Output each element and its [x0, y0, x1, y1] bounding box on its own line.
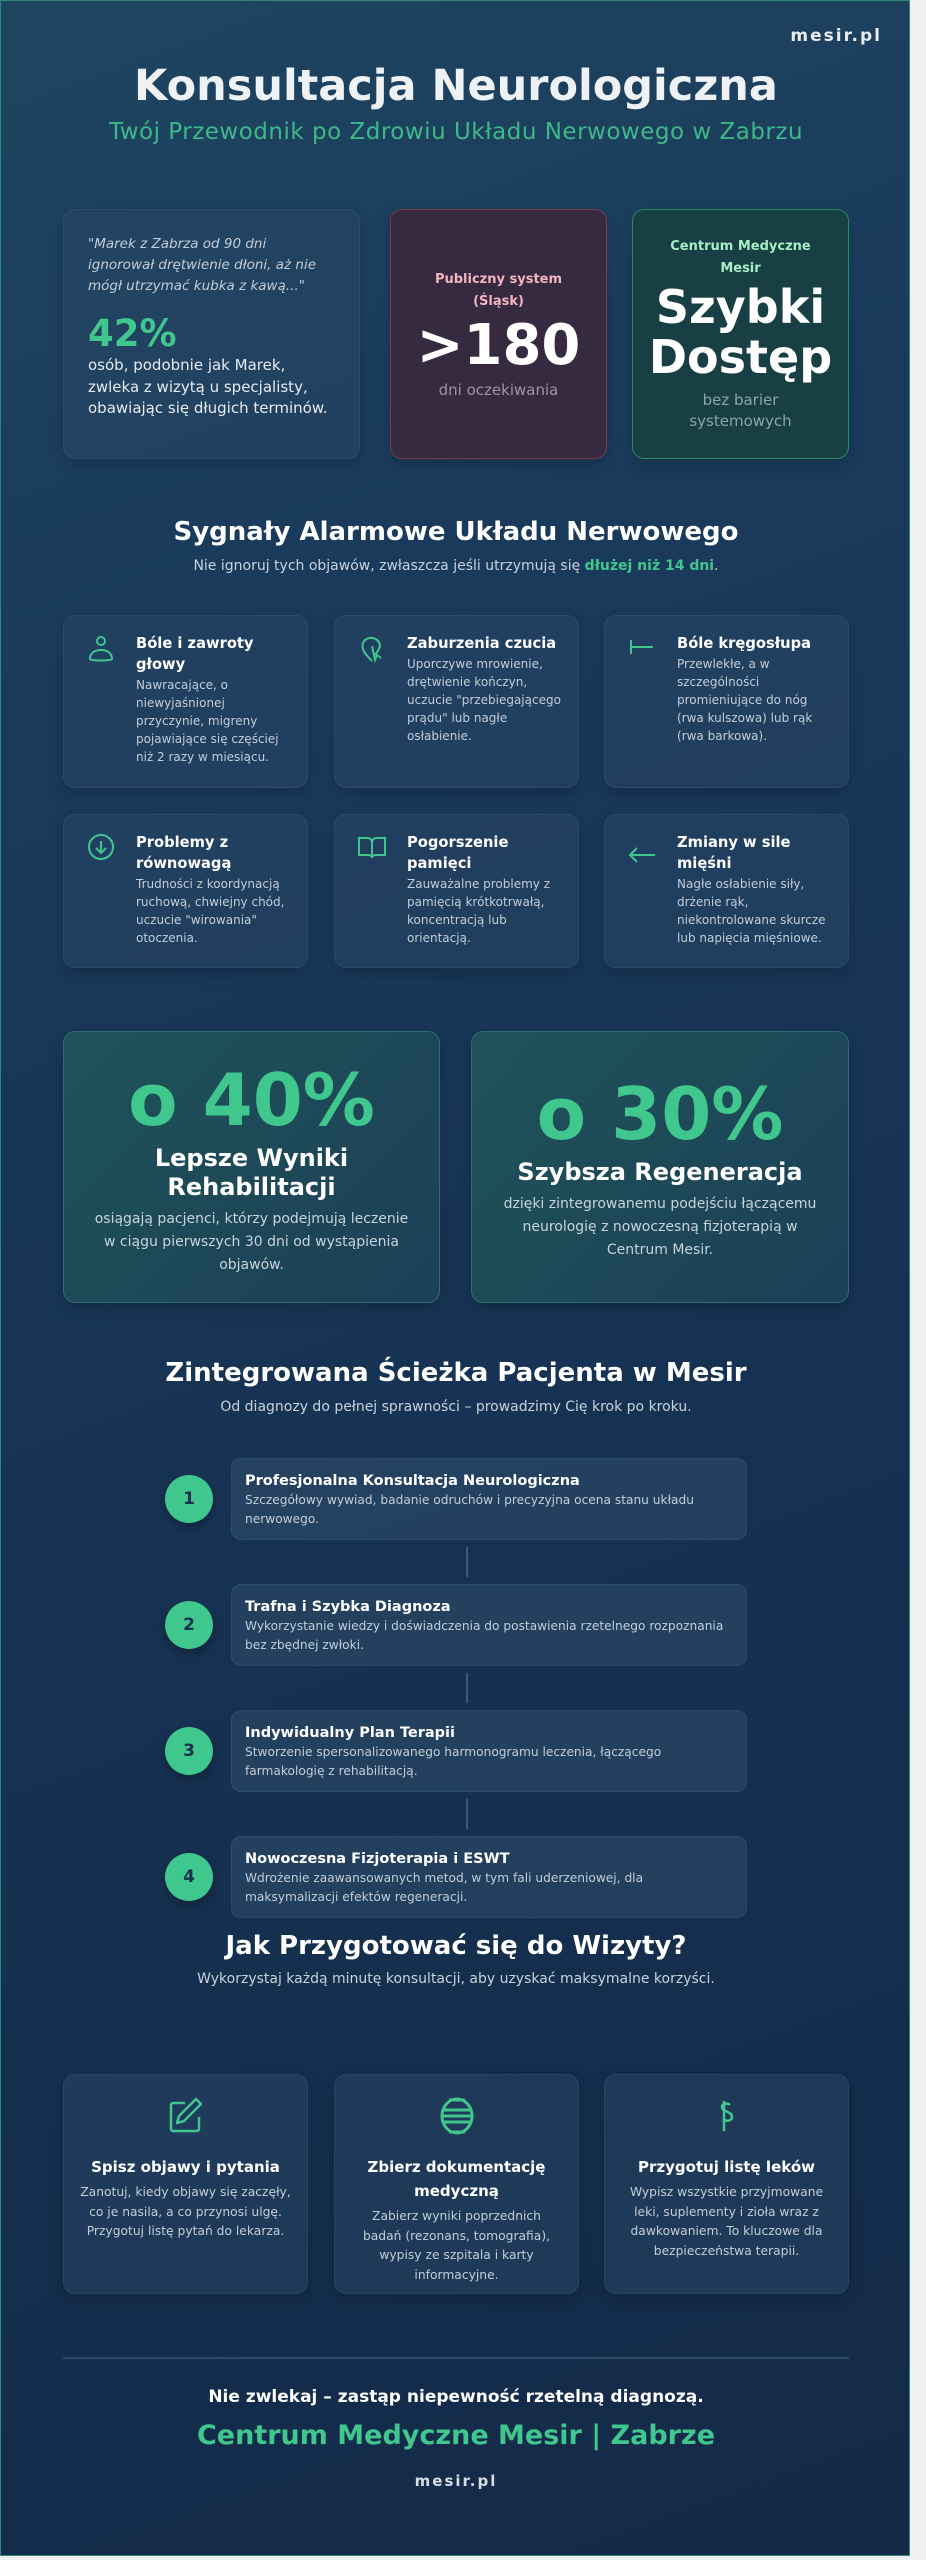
- footer brand: Centrum Medyczne Mesir | Zabrze: [197, 2420, 715, 2451]
- stat description: osób, podobnie jak Marek, zwleka z wizytą u specjalisty, obawiając się długich terminów.: [88, 356, 328, 417]
- icon: touch: [362, 636, 382, 664]
- step box 3: Indywidualny Plan Terapii: [245, 1725, 455, 1741]
- step box 2: [231, 1584, 747, 1666]
- icon: arrow line: [630, 640, 653, 654]
- panel: sensory disorders: Uporczywe mrowienie, drętwienie kończyn, uczucie "przebiegającego prądu" lub nagłe osłabienie.: [407, 657, 561, 743]
- panel: muscle strength: [604, 814, 849, 968]
- subtitle: Twój Przewodnik po Zdrowiu Układu Nerwowego w Zabrzu: [109, 119, 803, 145]
- panel: memory: Pogorszenie pamięci: [407, 834, 508, 872]
- label: Mesir: [720, 261, 761, 276]
- big text: Dostęp: [649, 330, 832, 384]
- panel: documentation: [334, 2074, 579, 2294]
- panel: medication list: Wypisz wszystkie przyjmowane leki, suplementy i zioła wraz z dawkowaniem. To kluczowe dla bezpieczeństwa terapii.: [630, 2185, 823, 2258]
- title: Konsultacja Neurologiczna: [134, 61, 778, 111]
- panel: documentation: Zbierz dokumentację medyczną: [368, 2158, 545, 2200]
- panel: spine pain: Przewlekłe, a w szczególności promieniujące do nóg (rwa kulszowa) lub rąk (rwa barkowa).: [677, 657, 812, 743]
- step box 2: Wykorzystanie wiedzy i doświadczenia do postawienia rzetelnego rozpoznania bez zbędnej zwłoki.: [245, 1619, 723, 1652]
- label: [435, 272, 562, 309]
- brand link top: mesir.pl: [790, 26, 882, 46]
- panel: Marek story: [63, 209, 360, 459]
- stat description: dzięki zintegrowanemu podejściu łączącemu neurologię z nowoczesną fizjoterapią w Centrum Mesir.: [504, 1196, 816, 1258]
- panel: write symptoms: Zanotuj, kiedy objawy się zaczęły, co je nasila, a co przynosi ulgę. Przygotuj listę pytań do lekarza.: [80, 2185, 291, 2238]
- panel: stat 40%: [63, 1031, 440, 1303]
- caption: dni oczekiwania: [439, 381, 558, 399]
- panel: muscle strength: Zmiany w sile mięśni: [677, 834, 790, 872]
- label: (Śląsk): [473, 294, 524, 309]
- step box 1: Profesjonalna Konsultacja Neurologiczna: [245, 1473, 580, 1489]
- big number: >180: [417, 313, 580, 378]
- step box 1: [231, 1458, 747, 1540]
- icon: circle arrow down: [88, 834, 114, 860]
- panel: sensory disorders: Zaburzenia czucia: [407, 635, 556, 652]
- panel: headaches: [63, 615, 308, 788]
- footer link: mesir.pl: [415, 2472, 497, 2490]
- stat title: Lepsze Wyniki: [155, 1144, 348, 1172]
- quote: "Marek z Zabrza od 90 dni ignorował drętwienie dłoni, aż nie mógł utrzymać kubka z kawą...": [88, 236, 316, 294]
- subheading: preparation: Wykorzystaj każdą minutę konsultacji, aby uzyskać maksymalne korzyści.: [197, 1971, 715, 1987]
- caption: [689, 391, 792, 430]
- big text: [649, 280, 832, 384]
- panel: write symptoms: [63, 2074, 308, 2294]
- panel: muscle strength: Nagłe osłabienie siły, drżenie rąk, niekontrolowane skurcze lub napięcia mięśniowe.: [677, 877, 826, 945]
- step number 3: 3: [183, 1741, 195, 1761]
- panel: headaches: Nawracające, o niewyjaśnionej przyczynie, migreny pojawiające się częściej niż 2 razy w miesiącu.: [136, 678, 279, 764]
- step box 4: [231, 1836, 747, 1918]
- panel: memory: [334, 814, 579, 968]
- step number 4: [165, 1853, 213, 1901]
- panel: balance: [63, 814, 308, 968]
- subheading: patient path: Od diagnozy do pełnej sprawności – prowadzimy Cię krok po kroku.: [220, 1399, 692, 1415]
- step 4: [164, 1836, 747, 1918]
- step number 4: 4: [183, 1867, 195, 1887]
- big text: Szybki: [656, 280, 825, 334]
- label: Centrum Medyczne: [670, 239, 811, 254]
- panel: medication list: Przygotuj listę leków: [638, 2158, 815, 2176]
- panel: balance: Trudności z koordynacją ruchową, chwiejny chód, uczucie "wirowania" otoczenia.: [136, 877, 284, 945]
- stat title: [155, 1144, 348, 1200]
- step box 3: Stworzenie spersonalizowanego harmonogramu leczenia, łączącego farmakologię z rehabilitacją.: [245, 1745, 661, 1778]
- stat title: Rehabilitacji: [167, 1172, 336, 1200]
- big number: o 40%: [128, 1058, 375, 1142]
- panel: balance: Problemy z równowagą: [136, 834, 231, 872]
- step number 3: [165, 1727, 213, 1775]
- icon: person: [89, 636, 113, 662]
- step number 1: 1: [183, 1489, 195, 1509]
- subheading: warning signs: Nie ignoruj tych objawów, zwłaszcza jeśli utrzymują się dłużej niż 14 dni.: [193, 558, 719, 574]
- step 1: [163, 1458, 747, 1540]
- panel: Mesir fast access: [632, 209, 849, 459]
- step number 2: [165, 1601, 213, 1649]
- panel: stat 30%: [471, 1031, 849, 1303]
- label: [670, 239, 811, 276]
- footer call to action: Nie zwlekaj – zastąp niepewność rzetelną diagnozą.: [208, 2387, 704, 2407]
- panel: sensory disorders: [334, 615, 579, 788]
- step number 1: [165, 1475, 213, 1523]
- step number 2: 2: [183, 1615, 195, 1635]
- caption: bez barier: [703, 391, 778, 409]
- icon: book: [358, 837, 386, 858]
- step 3: [164, 1710, 747, 1792]
- stat description: osiągają pacjenci, którzy podejmują leczenie w ciągu pierwszych 30 dni od wystąpienia objawów.: [95, 1210, 408, 1272]
- step box 4: Nowoczesna Fizjoterapia i ESWT: [245, 1851, 510, 1867]
- step box 1: Szczegółowy wywiad, badanie odruchów i precyzyjna ocena stanu układu nerwowego.: [245, 1493, 694, 1526]
- heading: warning signs: Sygnały Alarmowe Układu Nerwowego: [173, 517, 739, 547]
- heading: preparation: Jak Przygotować się do Wizyty?: [225, 1931, 687, 1961]
- step box 2: Trafna i Szybka Diagnoza: [245, 1599, 451, 1615]
- panel: public system: [390, 209, 607, 459]
- icon: dollar-like symbol: [720, 2101, 734, 2131]
- stat 42%: 42%: [88, 312, 177, 355]
- panel: memory: Zauważalne problemy z pamięcią krótkotrwałą, koncentracją lub orientacją.: [407, 877, 550, 945]
- stat title: Szybsza Regeneracja: [517, 1158, 803, 1186]
- step 2: [163, 1584, 747, 1666]
- label: Publiczny system: [435, 272, 562, 287]
- panel: write symptoms: Spisz objawy i pytania: [91, 2158, 280, 2176]
- step box 3: [231, 1710, 747, 1792]
- panel: spine pain: Bóle kręgosłupa: [677, 635, 811, 652]
- panel: medication list: [604, 2074, 849, 2294]
- panel: headaches: Bóle i zawroty głowy: [136, 635, 254, 673]
- heading: patient path: Zintegrowana Ścieżka Pacjenta w Mesir: [165, 1358, 747, 1388]
- icon: left arrow: [628, 847, 655, 863]
- icon: stacked disc: [440, 2098, 474, 2134]
- big number: o 30%: [537, 1072, 783, 1156]
- step box 4: Wdrożenie zaawansowanych metod, w tym fali uderzeniowej, dla maksymalizacji efektów regeneracji.: [245, 1871, 643, 1904]
- caption: systemowych: [689, 412, 792, 430]
- icon: pencil note: [170, 2098, 202, 2132]
- panel: spine pain: [604, 615, 849, 788]
- panel: documentation: Zabierz wyniki poprzednich badań (rezonans, tomografia), wypisy ze szpitala i karty informacyjne.: [363, 2209, 550, 2282]
